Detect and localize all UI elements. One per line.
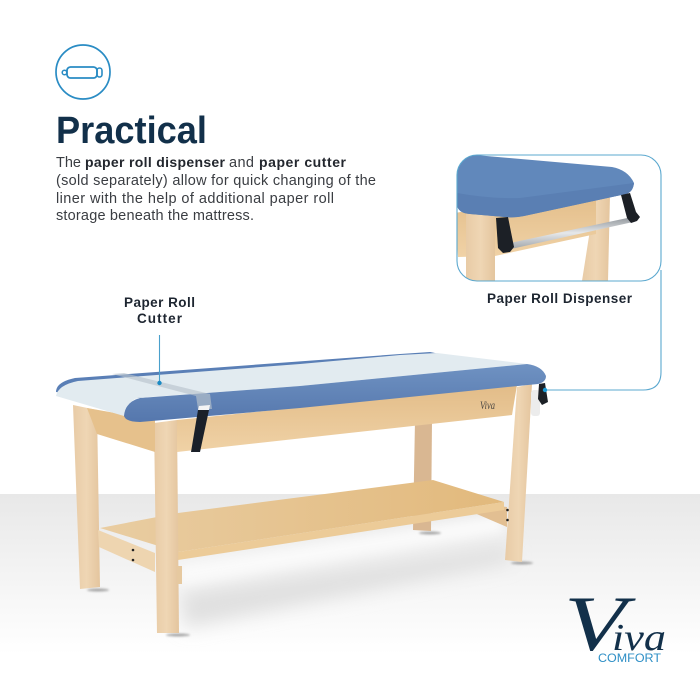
description text: and xyxy=(229,155,254,171)
inset apron xyxy=(458,200,596,257)
cutter band xyxy=(112,373,212,409)
massage table xyxy=(56,352,548,636)
callout label: paper roll dispenser: Paper Roll Dispenser xyxy=(487,291,633,306)
description text: storage beneath the mattress. xyxy=(56,208,254,224)
dispenser bracket xyxy=(538,383,548,405)
brand logo: COMFORT xyxy=(598,653,661,665)
inset rod xyxy=(510,217,633,249)
paper roll xyxy=(531,390,540,416)
paper liner xyxy=(56,353,527,416)
cutter leader line and dot xyxy=(157,335,162,385)
title: Practical xyxy=(56,110,207,152)
front left leg xyxy=(154,420,179,633)
description text: The xyxy=(56,155,81,171)
cutter strap xyxy=(191,405,210,452)
description text xyxy=(56,154,376,224)
label: paper roll cutter: Cutter xyxy=(137,311,183,326)
label: paper roll cutter: Paper Roll xyxy=(124,295,195,310)
inset front leg xyxy=(466,214,495,281)
back left leg xyxy=(73,405,100,589)
label: paper roll cutter xyxy=(124,295,195,326)
dispenser dot xyxy=(543,388,547,392)
brand logo: V xyxy=(564,580,637,667)
callout: paper roll dispenser inset xyxy=(455,155,661,281)
brand logo xyxy=(564,580,666,667)
front apron xyxy=(177,385,517,452)
icon: paper roll xyxy=(56,45,110,99)
back right leg xyxy=(413,420,432,531)
shelf xyxy=(100,480,504,560)
floor shadow xyxy=(180,545,510,628)
floor glow under shelf xyxy=(180,515,505,584)
inset back leg xyxy=(582,195,610,281)
inset brackets xyxy=(496,217,514,253)
inset mattress xyxy=(457,155,634,217)
mattress front xyxy=(124,364,546,422)
front right leg xyxy=(505,384,532,562)
background floor xyxy=(0,494,700,700)
description text: paper cutter xyxy=(259,154,347,170)
description text: liner with the help of additional paper roll xyxy=(56,191,334,207)
callout connector line xyxy=(545,270,661,390)
description text: (sold separately) allow for quick changing of the xyxy=(56,173,376,189)
brand logo: iva xyxy=(612,617,666,659)
description text: paper roll dispenser xyxy=(85,154,226,170)
mattress back edge xyxy=(56,352,440,400)
apron logo: Viva xyxy=(480,398,495,412)
side apron xyxy=(87,408,155,452)
foot shadows xyxy=(87,532,533,636)
right side crosspiece xyxy=(472,505,507,527)
left side crosspiece xyxy=(98,530,155,572)
